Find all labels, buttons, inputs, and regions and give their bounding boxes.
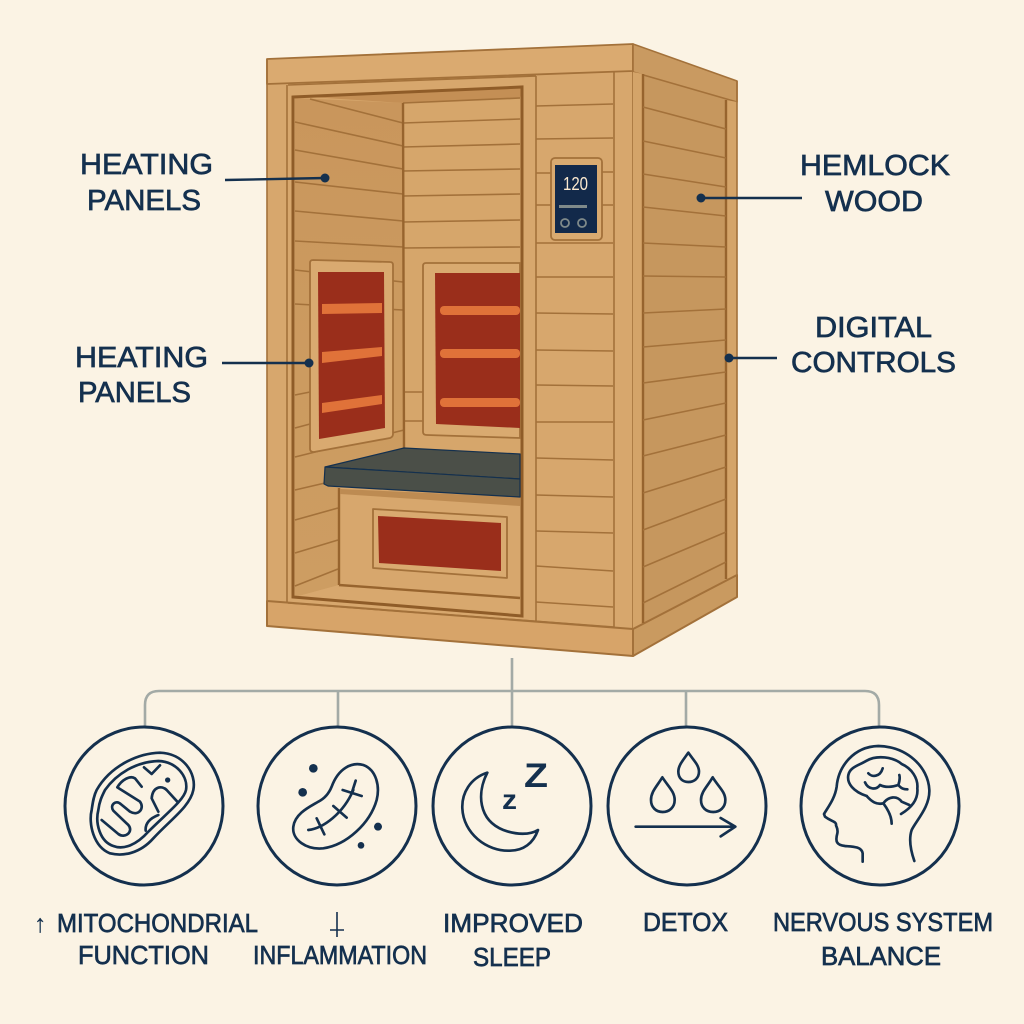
callout: digital controls <box>724 312 956 379</box>
callout: heating panels upper: HEATING <box>80 149 213 181</box>
temperature readout: 120 <box>563 174 588 194</box>
connector tree <box>145 658 879 726</box>
benefit: mitochondrial function <box>34 727 258 970</box>
label: DETOX <box>643 907 728 937</box>
icon: moon and z letters: Z <box>524 757 548 795</box>
label: NERVOUS SYSTEM <box>773 907 993 937</box>
label: MITOCHONDRIAL <box>57 908 258 938</box>
icon: moon and z letters <box>462 757 548 851</box>
icon: mitochondrion <box>91 753 194 855</box>
callout: hemlock wood: WOOD <box>825 186 923 218</box>
callout: hemlock wood: HEMLOCK <box>800 150 951 182</box>
label <box>443 908 583 972</box>
callout: digital controls: DIGITAL <box>815 312 932 344</box>
sauna cabin illustration <box>267 44 737 656</box>
icon: head with brain <box>824 746 929 862</box>
bench <box>324 448 520 506</box>
callout: heating panels lower: HEATING <box>75 342 208 374</box>
digital control panel <box>551 158 602 240</box>
cabin right side <box>633 44 737 656</box>
callout: hemlock wood <box>696 150 951 218</box>
callout: heating panels lower: PANELS <box>78 377 191 409</box>
callout: digital controls: CONTROLS <box>791 347 956 379</box>
label: INFLAMMATION <box>253 940 427 970</box>
lower heating panel <box>373 509 507 578</box>
label: FUNCTION <box>78 940 209 970</box>
sauna interior <box>293 87 522 616</box>
label <box>773 907 993 971</box>
label: ↑ <box>34 910 46 938</box>
label: SLEEP <box>473 942 551 972</box>
label: BALANCE <box>821 941 941 971</box>
callout: heating panels lower <box>75 342 314 409</box>
benefit: improved sleep <box>433 727 591 972</box>
label <box>34 908 258 970</box>
icon: inflamed cell <box>293 764 382 849</box>
benefit: inflammation <box>253 727 427 970</box>
icon: droplets and arrow <box>636 753 735 836</box>
right heating panel <box>423 263 520 438</box>
cabin front face <box>267 44 633 656</box>
icon: moon and z letters: z <box>502 784 517 815</box>
label: IMPROVED <box>443 908 583 938</box>
down marker <box>330 912 344 937</box>
callout: heating panels upper: PANELS <box>87 185 201 217</box>
left heating panel <box>310 260 393 452</box>
benefit: detox <box>608 727 766 937</box>
callout: heating panels upper <box>80 149 330 217</box>
benefit: nervous system balance <box>773 727 993 971</box>
